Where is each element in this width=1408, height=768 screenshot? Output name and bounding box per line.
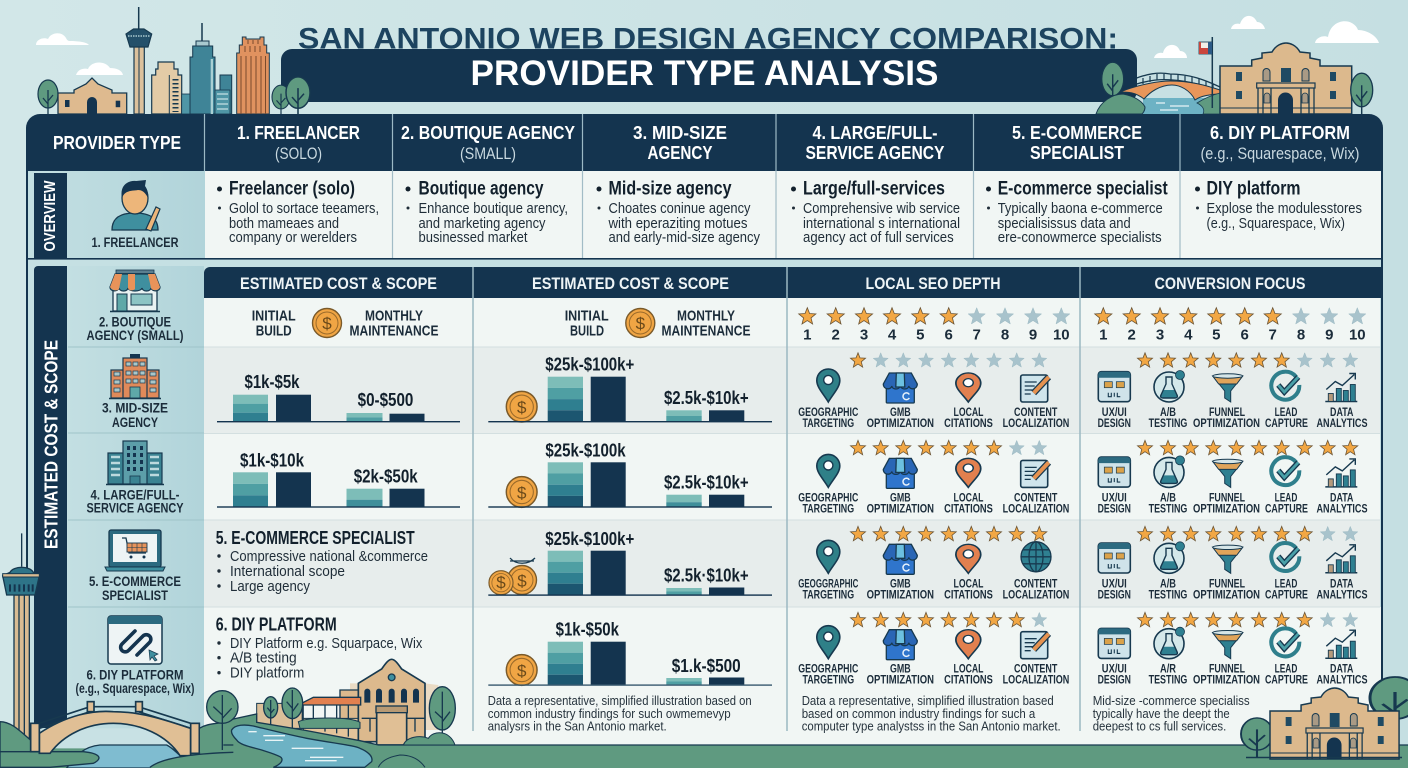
overview: freelancer: both mameaes and xyxy=(229,215,339,232)
icon: DIY website builder: 6. DIY PLATFORM xyxy=(86,668,184,682)
bar chart: column 2 mid-size row: $2.5k-$10k+ xyxy=(664,388,749,408)
conversion icons: large row: TESTING xyxy=(1149,501,1187,515)
bar chart: column 2 DIY row xyxy=(488,620,772,686)
table header row: 2. BOUTIQUE AGENCY xyxy=(401,122,576,143)
table header row: SERVICE AGENCY xyxy=(806,142,945,163)
column sub-headers: CONVERSION FOCUS xyxy=(1154,274,1306,293)
footnote: column 4: deepest to cs full services. xyxy=(1093,718,1226,734)
conversion icons: DIY row: FUNNEL xyxy=(1209,662,1245,676)
overview: boutique xyxy=(406,178,568,246)
SEO rating scale 1-10: 5 xyxy=(916,326,924,344)
overview: DIY: Explose the modulesstores xyxy=(1206,200,1362,217)
bar chart: column 1 large row xyxy=(217,450,460,508)
SEO icons: DIY row: LOCAL xyxy=(954,662,984,676)
SEO icons: DIY row: GMB xyxy=(890,662,911,676)
icon: large office xyxy=(86,441,184,516)
conversion rating scale 1-10: 5 xyxy=(1212,326,1220,344)
conversion rating scale 1-10: 1 xyxy=(1099,326,1107,344)
SEO rating scale 1-10: 1 xyxy=(803,326,811,344)
conversion rating scale 1-10: 10 xyxy=(1349,326,1366,344)
SEO icons: large row: TARGETING xyxy=(802,501,854,515)
legend: column 1 xyxy=(252,308,438,340)
bar chart: column 2 DIY row: $ xyxy=(517,662,527,680)
icon: mid-size office: 3. MID-SIZE xyxy=(102,400,168,416)
SEO icons: DIY row: OPTIMIZATION xyxy=(867,673,934,687)
table header row: (e.g., Squarespace, Wix) xyxy=(1200,144,1360,163)
bar chart: column 2 large row: $2.5k-$10k+ xyxy=(664,472,749,492)
conversion icons: DIY row: CAPTURE xyxy=(1265,673,1308,687)
legend: column 2: MONTHLY xyxy=(677,308,735,324)
SEO icons: mid-size row: CONTENT xyxy=(1014,405,1058,419)
bar chart: column 2 mid-size row xyxy=(488,354,772,422)
bar chart: column 1 large row: $2k-$50k xyxy=(354,466,419,486)
column sub-headers: ESTIMATED COST & SCOPE xyxy=(240,274,437,293)
text block: DIY platform: DIY Platform e.g. Squarpace, Wix xyxy=(230,635,423,652)
conversion icons: large row: UX/UI xyxy=(1102,490,1127,504)
text block: e-commerce specialist: Large agency xyxy=(230,578,310,595)
text block: DIY platform: 6. DIY PLATFORM xyxy=(216,614,337,634)
illustration: Alamo bottom right xyxy=(1241,677,1408,759)
SEO icons: mid-size row: LOCALIZATION xyxy=(1003,416,1069,430)
conversion rating scale 1-10: 6 xyxy=(1241,326,1249,344)
text block: DIY platform xyxy=(216,614,423,682)
SEO rating scale 1-10: 8 xyxy=(1001,326,1009,344)
table header row xyxy=(26,114,1383,171)
icon: large office: SERVICE AGENCY xyxy=(86,500,184,516)
conversion icons: e-commerce row: DESIGN xyxy=(1098,587,1131,601)
bar chart: column 2 e-commerce row: $ xyxy=(496,573,506,592)
footnote: column 2: common industry findings for such owmemevyp xyxy=(488,706,731,721)
SEO icons: DIY row: LOCALIZATION xyxy=(1003,673,1069,687)
SEO rating scale 1-10: 7 xyxy=(973,326,981,344)
SEO icons: large row xyxy=(798,454,1069,515)
column sub-headers xyxy=(204,267,1381,298)
overview: mid-size: with eperaziting motues xyxy=(608,215,748,232)
SEO icons: e-commerce row xyxy=(798,540,1069,601)
icon: freelancer: 1. FREELANCER xyxy=(92,235,179,250)
bar chart: column 2 e-commerce row: $ xyxy=(517,572,527,590)
legend: column 1: MONTHLY xyxy=(365,308,423,324)
conversion icons: large row: A/B xyxy=(1160,490,1176,504)
footnote: column 4 xyxy=(1093,693,1250,734)
footnote: column 4: Mid-size -commerce specialiss xyxy=(1093,693,1250,708)
legend: column 1: MAINTENANCE xyxy=(350,322,438,340)
table header row: (SMALL) xyxy=(460,144,516,163)
SEO icons: large row: CITATIONS xyxy=(944,501,993,515)
overview: mid-size xyxy=(596,178,760,246)
SEO icons: e-commerce row: GMB xyxy=(890,576,911,590)
conversion icons: large row: LEAD xyxy=(1275,490,1298,504)
overview: e-commerce xyxy=(986,178,1168,246)
SEO rating scale 1-10: 2 xyxy=(832,326,840,344)
conversion rating scale 1-10: 8 xyxy=(1297,326,1305,344)
SEO icons: large row: CONTENT xyxy=(1014,490,1058,504)
conversion icons: large row: DESIGN xyxy=(1098,501,1131,515)
bar chart: column 2 large row: $ xyxy=(517,484,527,502)
footnote: column 3: based on common industry findings for such a xyxy=(802,706,1036,721)
conversion icons: mid-size row xyxy=(1098,370,1368,430)
data rows background xyxy=(0,298,1408,746)
SEO icons: mid-size row: TARGETING xyxy=(802,416,854,430)
footnote: column 2 xyxy=(488,693,752,734)
legend: column 1: BUILD xyxy=(256,322,292,340)
overview: boutique: Boutique agency xyxy=(418,178,544,200)
SEO icons: large row: GEOGRAPHIC xyxy=(798,490,859,504)
bar chart: column 2 mid-size row: $25k-$100k+ xyxy=(545,354,634,374)
overview: freelancer: Golol to sortace teeamers, xyxy=(229,200,379,217)
overview: boutique: businessed market xyxy=(418,229,528,246)
SEO rating scale 1-10: 9 xyxy=(1029,326,1037,344)
overview: DIY: DIY platform xyxy=(1206,178,1300,200)
SEO icons: e-commerce row: CITATIONS xyxy=(944,587,993,601)
SEO icons: large row: LOCAL xyxy=(954,490,984,504)
table header row: SPECIALIST xyxy=(1030,142,1125,163)
estimated cost side tab xyxy=(34,266,67,728)
conversion icons: DIY row: OPTIMIZATION xyxy=(1193,673,1260,687)
title banner xyxy=(281,49,1137,102)
overview: DIY xyxy=(1195,178,1362,232)
footnote: column 2: analysrs in the San Antonio market. xyxy=(488,718,667,734)
legend: column 2: BUILD xyxy=(570,322,604,340)
SEO icons: DIY row: CITATIONS xyxy=(944,673,993,687)
SEO icons: e-commerce row: TARGETING xyxy=(802,587,854,601)
bar chart: column 2 large row: $25k-$100k xyxy=(545,440,626,460)
text block: DIY platform: DIY platform xyxy=(230,665,304,682)
conversion icons: mid-size row: ANALYTICS xyxy=(1316,416,1368,430)
SEO icons: DIY row: TARGETING xyxy=(802,673,854,687)
table header row: 1. FREELANCER xyxy=(237,122,360,143)
footnote: column 3: Data a representative, simplified illustration based xyxy=(802,693,1054,708)
overview: mid-size: Choates coninue agency xyxy=(608,200,751,217)
SEO icons: large row: OPTIMIZATION xyxy=(867,501,934,515)
title line: SAN ANTONIO WEB DESIGN AGENCY COMPARISON: xyxy=(298,22,1118,56)
icon: boutique storefront: 2. BOUTIQUE xyxy=(99,314,171,330)
conversion icons: DIY row: LEAD xyxy=(1275,662,1298,676)
conversion icons: large row: CAPTURE xyxy=(1265,501,1308,515)
bar chart: column 2 DIY row: $1k-$50k xyxy=(556,620,620,640)
conversion icons: e-commerce row: CAPTURE xyxy=(1265,587,1308,601)
icon: DIY website builder: (e.g., Squarespace, Wix) xyxy=(76,681,194,696)
SEO icons: mid-size row: GMB xyxy=(890,405,911,419)
icon: e-commerce laptop: SPECIALIST xyxy=(102,588,169,603)
conversion icons: e-commerce row: DATA xyxy=(1330,576,1354,590)
left provider column xyxy=(34,266,204,746)
footnote: column 4: typically have the deept the xyxy=(1093,706,1230,721)
overview: e-commerce: specialisissus data and xyxy=(998,215,1131,232)
icon: freelancer xyxy=(92,180,179,250)
icon: large office: 4. LARGE/FULL- xyxy=(90,488,180,502)
overview side tab: OVERVIEW xyxy=(42,180,59,252)
conversion icons: e-commerce row: FUNNEL xyxy=(1209,576,1245,590)
conversion icons: large row: DATA xyxy=(1330,490,1354,504)
bar chart: column 1 mid-size row: $0-$500 xyxy=(358,390,413,410)
SEO icons: e-commerce row: OPTIMIZATION xyxy=(867,587,934,601)
text block: e-commerce specialist: Compressive national &commerce xyxy=(230,548,428,565)
conversion rating scale 1-10: 9 xyxy=(1325,326,1333,344)
conversion icons: e-commerce row: LEAD xyxy=(1275,576,1298,590)
table header row: 6. DIY PLATFORM xyxy=(1210,122,1350,143)
conversion icons: mid-size row: TESTING xyxy=(1149,416,1187,430)
conversion icons: mid-size row: DESIGN xyxy=(1098,416,1131,430)
illustration: tower, bridge, river and historic building bottom left xyxy=(0,533,1408,768)
bar chart: column 2 e-commerce row: $2.5k·$10k+ xyxy=(664,566,749,586)
illustration: clouds top right xyxy=(1154,16,1379,58)
illustration: San Antonio skyline top left xyxy=(36,7,269,114)
conversion icons: mid-size row: A/B xyxy=(1160,405,1176,419)
SEO rating scale 1-10: 6 xyxy=(945,326,953,344)
SEO rating scale 1-10: 10 xyxy=(1053,326,1070,344)
SEO icons: DIY row xyxy=(798,626,1069,687)
overview: large: international s international xyxy=(803,215,960,232)
overview: freelancer xyxy=(217,178,379,246)
overview: e-commerce: Typically baona e-commerce xyxy=(998,200,1163,217)
bar chart: column 2 DIY row: $1.k-$500 xyxy=(672,656,741,676)
overview: e-commerce: ere-conowmerce specialists xyxy=(998,229,1162,246)
overview row xyxy=(28,171,1381,260)
SEO star ratings by row xyxy=(850,353,1047,627)
legend: column 1: INITIAL xyxy=(252,308,296,324)
SEO icons: large row: GMB xyxy=(890,490,911,504)
conversion icons: DIY row xyxy=(1098,627,1368,687)
footnote: column 2: Data a representative, simplified illustration based on xyxy=(488,693,752,708)
table header row: 3. MID-SIZE xyxy=(633,122,727,143)
conversion icons: e-commerce row: ANALYTICS xyxy=(1316,587,1368,601)
overview: e-commerce: E-commerce specialist xyxy=(998,178,1168,200)
text block: e-commerce specialist: International scope xyxy=(230,563,345,580)
conversion icons: large row xyxy=(1098,456,1368,515)
conversion icons: mid-size row: DATA xyxy=(1330,405,1354,419)
bar chart: column 2 e-commerce row xyxy=(488,529,772,596)
overview: large xyxy=(791,178,960,246)
illustration: river bridge, flag and Alamo top right xyxy=(1096,37,1373,114)
bar chart: column 2 large row xyxy=(488,440,772,508)
table header row: PROVIDER TYPE xyxy=(53,132,181,153)
conversion rating scale 1-10: 4 xyxy=(1184,326,1193,344)
icon: mid-size office: AGENCY xyxy=(112,415,158,430)
legend: column 1: $ xyxy=(322,314,332,333)
conversion icons: DIY row: ANALYTICS xyxy=(1316,673,1368,687)
SEO icons: mid-size row: OPTIMIZATION xyxy=(867,416,934,430)
estimated cost side tab: ESTIMATED COST & SCOPE xyxy=(42,340,62,549)
legend: column 2: INITIAL xyxy=(565,308,609,324)
conversion icons: DIY row: DATA xyxy=(1330,662,1354,676)
text block: DIY platform: A/B testing xyxy=(230,650,297,667)
conversion rating scale 1-10: 7 xyxy=(1269,326,1277,344)
footnote: column 3 xyxy=(802,693,1061,734)
conversion icons: e-commerce row: UX/UI xyxy=(1102,576,1127,590)
conversion icons: large row: ANALYTICS xyxy=(1316,501,1368,515)
overview: large: agency act of full services xyxy=(803,229,954,246)
legend: column 2: $ xyxy=(636,314,646,333)
overview: DIY: (e.g., Squarespace, Wix) xyxy=(1206,215,1345,232)
SEO icons: mid-size row: LOCAL xyxy=(954,405,984,419)
overview: freelancer: company or werelders xyxy=(229,229,357,246)
overview: freelancer: Freelancer (solo) xyxy=(229,178,355,200)
icon: boutique storefront: AGENCY (SMALL) xyxy=(86,328,184,343)
SEO rating scale 1-10: 4 xyxy=(888,326,897,344)
legend: column 2: MAINTENANCE xyxy=(662,322,750,340)
icon: mid-size office xyxy=(102,354,168,430)
bar chart: column 1 large row: $1k-$10k xyxy=(240,450,305,470)
table header row: 4. LARGE/FULL- xyxy=(812,122,938,143)
SEO icons: e-commerce row: LOCALIZATION xyxy=(1003,587,1069,601)
icon: e-commerce laptop: 5. E-COMMERCE xyxy=(89,574,181,589)
icon: DIY website builder xyxy=(76,616,194,696)
bar chart: column 1 mid-size row: $1k-$5k xyxy=(244,372,300,392)
SEO icons: e-commerce row: LOCAL xyxy=(954,576,984,590)
footnote: column 3: computer type analystss in the San Antonio market. xyxy=(802,718,1061,734)
bar chart: column 2 mid-size row: $ xyxy=(517,398,527,417)
column sub-headers: LOCAL SEO DEPTH xyxy=(866,274,1000,293)
conversion icons: mid-size row: UX/UI xyxy=(1102,405,1127,419)
title banner: PROVIDER TYPE ANALYSIS xyxy=(470,54,938,93)
conversion rating scale 1-10: 3 xyxy=(1156,326,1164,344)
legend: column 2 xyxy=(565,308,750,340)
SEO icons: large row: LOCALIZATION xyxy=(1003,501,1069,515)
overview: mid-size: and early-mid-size agency xyxy=(608,229,760,246)
table header row: (SOLO) xyxy=(275,144,322,163)
text block: e-commerce specialist xyxy=(216,528,428,595)
icon: e-commerce laptop xyxy=(89,530,181,603)
SEO icons: mid-size row: GEOGRAPHIC xyxy=(798,405,859,419)
SEO icons: DIY row: CONTENT xyxy=(1014,662,1058,676)
overview: boutique: and marketing agency xyxy=(418,215,546,232)
SEO icons: e-commerce row: CONTENT xyxy=(1014,576,1058,590)
conversion icons: DIY row: A/R xyxy=(1160,662,1176,676)
conversion icons: e-commerce row xyxy=(1098,542,1368,601)
green ground band xyxy=(0,746,1408,768)
SEO icons: mid-size row xyxy=(798,369,1069,430)
overview: large: Large/full-services xyxy=(803,178,945,200)
conversion icons: DIY row: TESTING xyxy=(1149,673,1187,687)
bar chart: column 1 mid-size row xyxy=(217,372,460,422)
overview: boutique: Enhance boutique arency, xyxy=(418,200,568,217)
overview side tab xyxy=(34,173,67,258)
conversion rating scale 1-10 xyxy=(1095,308,1366,344)
table header row: 5. E-COMMERCE xyxy=(1012,122,1142,143)
conversion icons: DIY row: UX/UI xyxy=(1102,662,1127,676)
column sub-headers: ESTIMATED COST & SCOPE xyxy=(532,274,729,293)
conversion icons: mid-size row: LEAD xyxy=(1275,405,1298,419)
illustration: trees in front of the banner on the left xyxy=(272,77,310,115)
overview: large: Comprehensive wib service xyxy=(803,200,960,217)
conversion icons: mid-size row: OPTIMIZATION xyxy=(1193,416,1260,430)
conversion icons: large row: FUNNEL xyxy=(1209,490,1245,504)
SEO icons: DIY row: GEOGRAPHIC xyxy=(798,662,859,676)
SEO icons: e-commerce row: GEOGGRAPHIC xyxy=(798,576,859,590)
conversion star ratings by row xyxy=(1138,353,1358,627)
SEO icons: mid-size row: CITATIONS xyxy=(944,416,993,430)
conversion icons: e-commerce row: TESTING xyxy=(1149,587,1187,601)
SEO rating scale 1-10 xyxy=(799,308,1070,344)
icon: boutique storefront xyxy=(86,270,184,343)
table header row: AGENCY xyxy=(648,142,713,163)
overview: mid-size: Mid-size agency xyxy=(608,178,732,200)
conversion icons: e-commerce row: A/B xyxy=(1160,576,1176,590)
SEO rating scale 1-10: 3 xyxy=(860,326,868,344)
conversion icons: mid-size row: CAPTURE xyxy=(1265,416,1308,430)
text block: e-commerce specialist: 5. E-COMMERCE SPECIALIST xyxy=(216,528,415,548)
bar chart: column 2 e-commerce row: $25k-$100k+ xyxy=(545,529,634,549)
conversion icons: e-commerce row: OPTIMIZATION xyxy=(1193,587,1260,601)
conversion icons: mid-size row: FUNNEL xyxy=(1209,405,1245,419)
conversion rating scale 1-10: 2 xyxy=(1128,326,1136,344)
conversion icons: DIY row: DESIGN xyxy=(1098,673,1131,687)
conversion icons: large row: OPTIMIZATION xyxy=(1193,501,1260,515)
